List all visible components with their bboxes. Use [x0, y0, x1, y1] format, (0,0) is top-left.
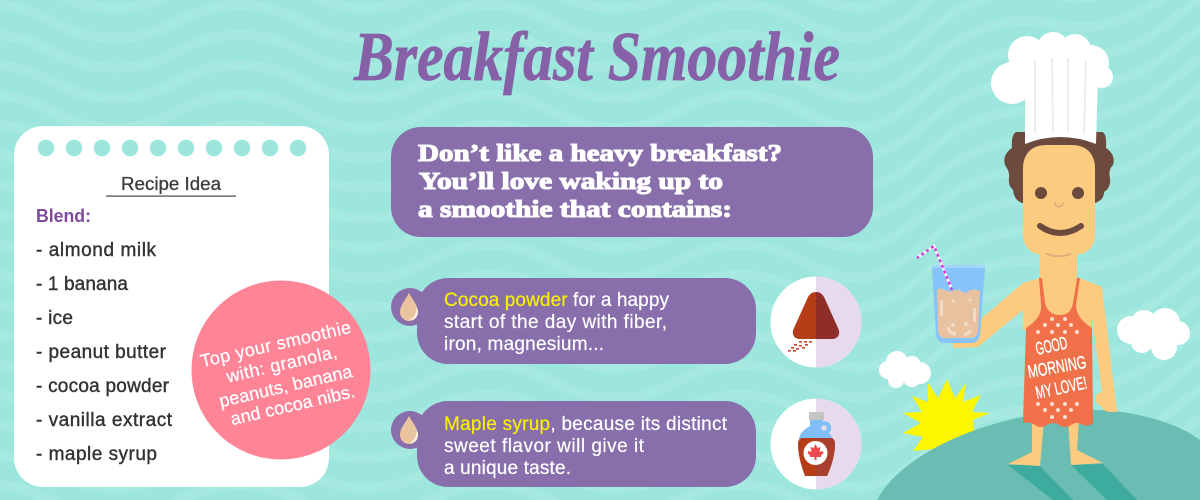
- cocoa text: Cocoa powder for a happy: [444, 290, 670, 311]
- ingredient list: - almond milk: [36, 240, 156, 261]
- neck: [1040, 245, 1077, 295]
- ingredient list: - ice: [36, 308, 73, 329]
- cocoa text: start of the day with fiber,: [444, 312, 667, 333]
- callout: toppings: peanuts, banana: [217, 361, 355, 411]
- callout: toppings: and cocoa nibs.: [229, 381, 357, 429]
- callout: toppings: [192, 280, 370, 460]
- card heading: Recipe Idea: [121, 173, 222, 194]
- illustration: foot shadows: [1008, 464, 1137, 500]
- illustration: chef character: [953, 32, 1117, 466]
- ingredient list: - vanilla extract: [36, 410, 173, 431]
- panel: intro heading: You’ll love waking up to: [419, 169, 723, 195]
- callout: toppings: with: granola,: [223, 342, 339, 387]
- callout: toppings: Top your smoothie: [198, 317, 353, 371]
- maple text: [444, 414, 728, 479]
- hat body: [1025, 75, 1098, 144]
- ingredient list: - maple syrup: [36, 444, 157, 465]
- card heading: [106, 173, 236, 197]
- illustration: left cloud: [879, 351, 931, 388]
- icon: maple syrup bottle: [770, 398, 862, 490]
- panel: intro heading: [391, 127, 873, 237]
- illustration: sun: [903, 379, 990, 451]
- hat puffs: [991, 32, 1113, 104]
- maple text: sweet flavor will give it: [444, 436, 645, 457]
- hat pleats: [1035, 58, 1086, 133]
- illustration: smoothie glass with straw: [917, 246, 985, 343]
- notebook holes: [38, 140, 306, 156]
- icon: drop: [400, 293, 418, 321]
- legs: [1008, 420, 1044, 466]
- face: [1023, 145, 1095, 255]
- maple text: a unique taste.: [444, 458, 571, 479]
- shirt slogan: GOOD: [1034, 333, 1069, 359]
- ingredient list: - peanut butter: [36, 342, 167, 363]
- shirt slogan: MORNING: [1026, 352, 1088, 382]
- ingredient list: - cocoa powder: [36, 376, 170, 397]
- icon: cocoa powder: [770, 276, 862, 368]
- panel: intro heading: Don’t like a heavy breakfast?: [418, 141, 782, 167]
- arms and torso: [953, 278, 1117, 412]
- panel: intro heading: a smoothie that contains:: [418, 197, 732, 223]
- panel: cocoa powder bubble: [391, 278, 756, 364]
- shirt slogan: [1026, 333, 1089, 403]
- ingredient list: - 1 banana: [36, 274, 128, 295]
- tank top: [1023, 278, 1093, 427]
- panel: maple syrup bubble: [391, 401, 756, 487]
- hair: [1004, 132, 1114, 203]
- cocoa text: iron, magnesium...: [444, 334, 604, 355]
- shirt slogan: MY LOVE!: [1034, 373, 1089, 403]
- illustration: right cloud: [1117, 308, 1190, 360]
- panel: recipe card: [14, 126, 329, 487]
- ingredient list: [36, 240, 173, 465]
- illustration: hill: [877, 410, 1200, 500]
- title: Breakfast Smoothie: [353, 19, 840, 96]
- icon: drop: [400, 416, 418, 444]
- blend label: Blend:: [36, 206, 91, 226]
- cocoa text: [444, 290, 670, 355]
- maple text: Maple syrup, because its distinct: [444, 414, 728, 435]
